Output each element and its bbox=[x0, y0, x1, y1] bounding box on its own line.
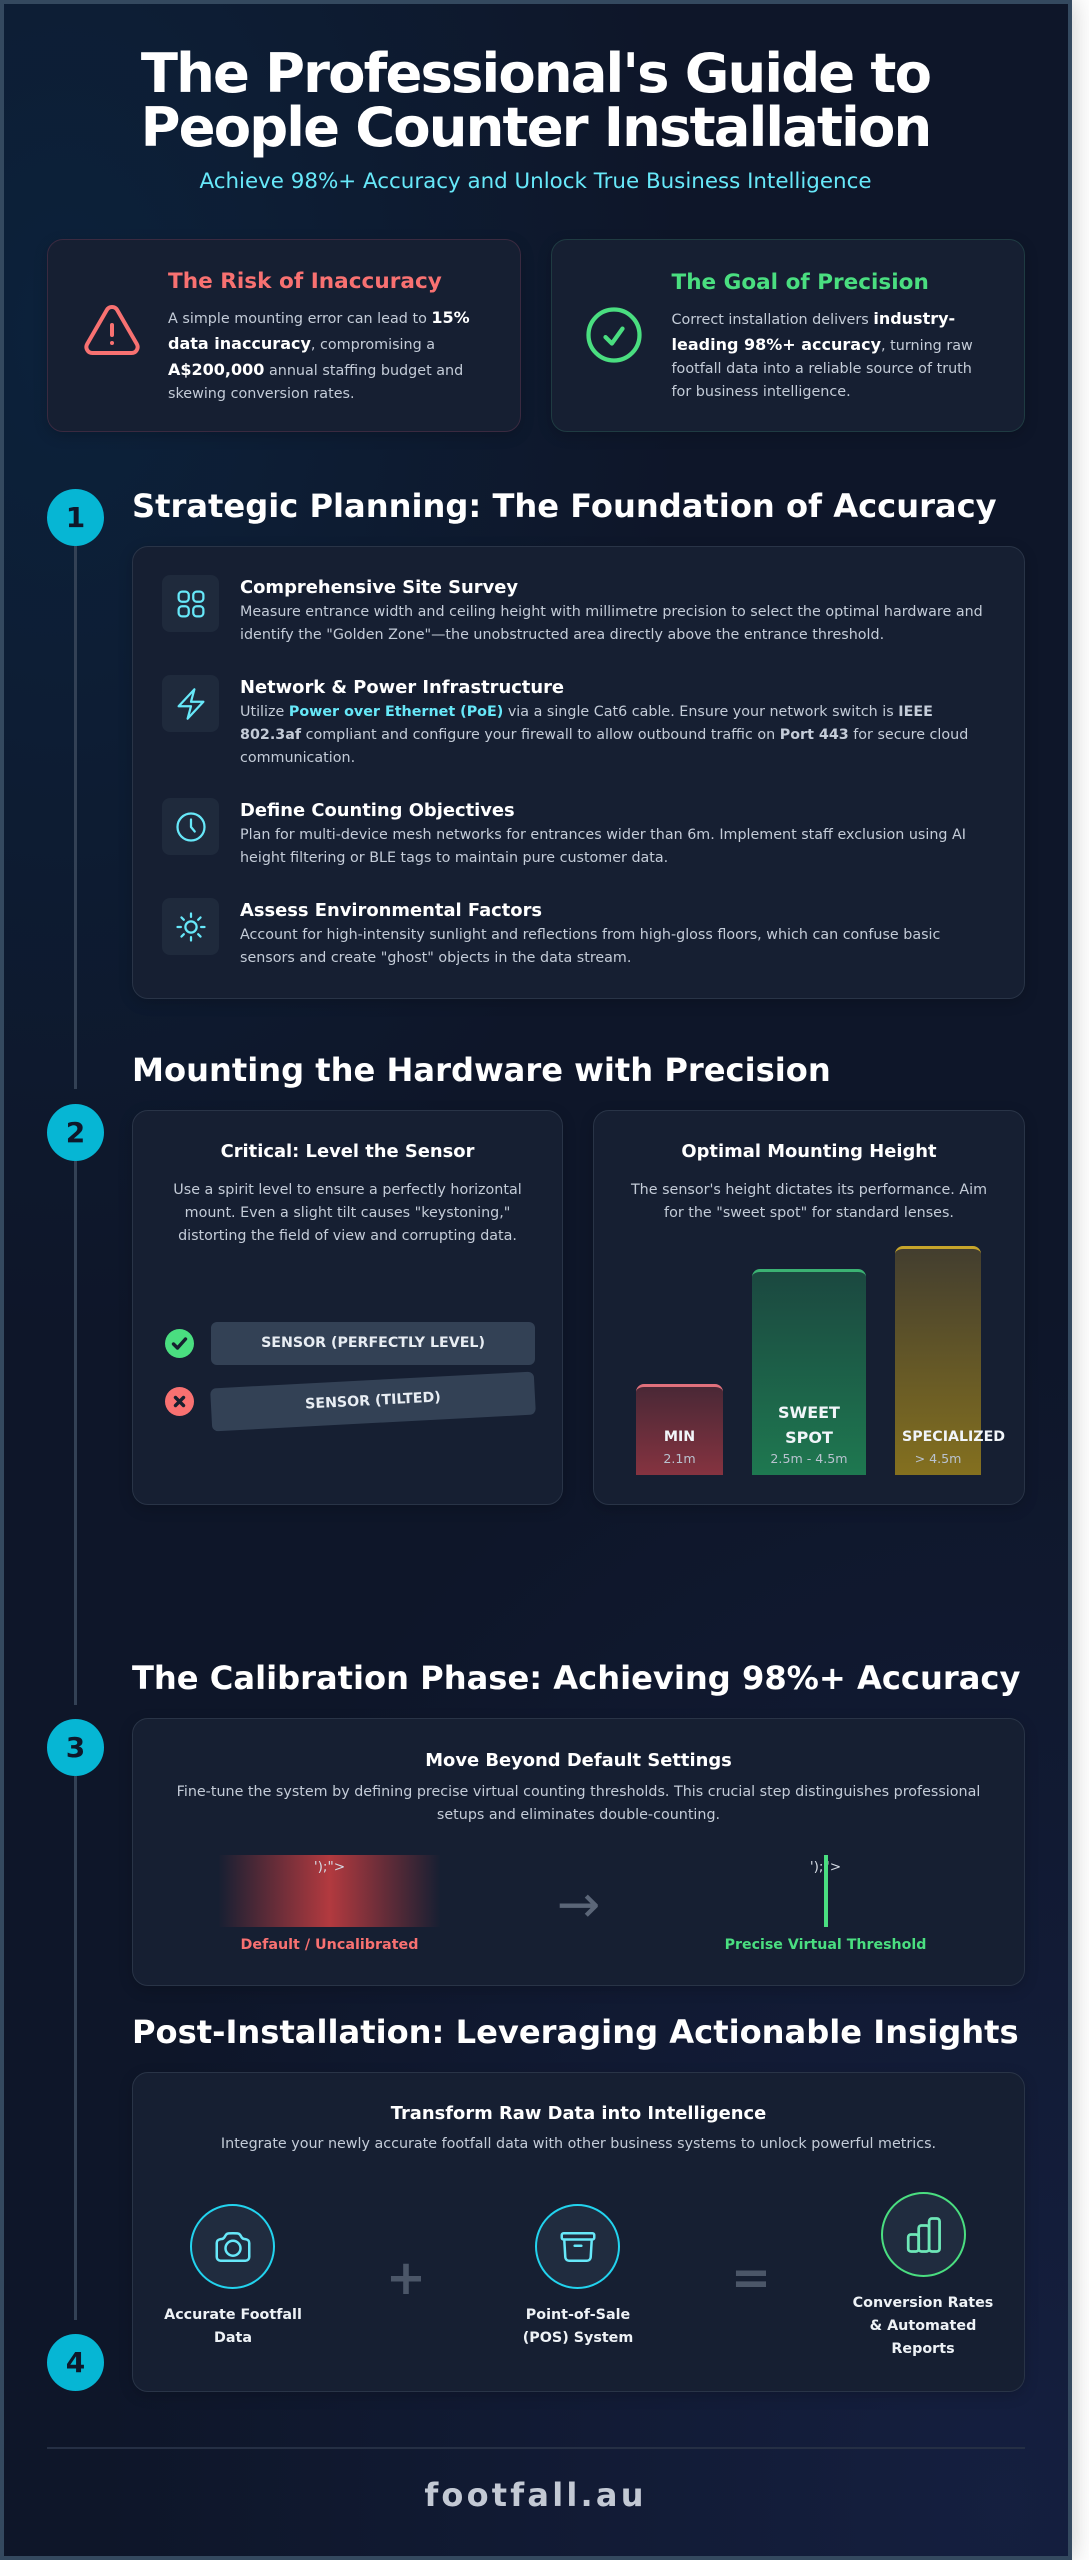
item text: counting objectives bbox=[240, 826, 966, 866]
item text: site survey: Measure entrance width and ceiling height with millimetre precision to select the optimal hardware and bbox=[240, 604, 983, 620]
panel: mounting height bbox=[593, 1110, 1025, 1505]
text: mounting height: for the "sweet spot" for standard lenses. bbox=[664, 1205, 954, 1221]
item text: site survey: identify the "Golden Zone"—the unobstructed area directly above the entrance threshold. bbox=[240, 626, 884, 642]
text: level the sensor bbox=[173, 1182, 522, 1244]
chart bar: minimum height bbox=[636, 1384, 723, 1475]
step number 1 bbox=[47, 489, 104, 546]
text: goal description: footfall data into a reliable source of truth bbox=[672, 360, 972, 376]
sensor bar: level bbox=[211, 1322, 535, 1365]
chart bar: specialized bbox=[895, 1246, 981, 1475]
item title: environmental factors: Assess Environmental Factors bbox=[240, 900, 542, 921]
visual: uncalibrated zone bbox=[218, 1855, 441, 1927]
text: goal description bbox=[672, 308, 973, 400]
heading: calibration: The Calibration Phase: Achieving 98%+ Accuracy bbox=[132, 1659, 1020, 1697]
heading: goal: The Goal of Precision bbox=[672, 270, 929, 295]
visual: uncalibrated zone: ');"> bbox=[314, 1859, 345, 1875]
item text: environmental factors: sensors and create "ghost" objects in the data stream. bbox=[240, 950, 631, 966]
step number 2 bbox=[47, 1104, 104, 1161]
icon: tilted cross bbox=[165, 1387, 194, 1416]
text: default settings: Fine-tune the system by defining precise virtual counting thresholds. This crucial step distinguishes professional bbox=[177, 1784, 980, 1800]
value: specialized: > 4.5m bbox=[915, 1451, 961, 1466]
item text: network and power: Utilize Power over Ethernet (PoE) via a single Cat6 cable. Ensure your network switch is IEEE bbox=[240, 704, 933, 720]
label: specialized: SPECIALIZED bbox=[902, 1429, 1005, 1445]
title: The Professional's Guide to bbox=[141, 42, 930, 105]
step number 3: 3 bbox=[66, 1731, 85, 1764]
item text: network and power bbox=[240, 704, 968, 766]
item text: network and power: communication. bbox=[240, 750, 355, 766]
item text: counting objectives: height filtering or BLE tags to maintain pure customer data. bbox=[240, 850, 668, 866]
step number 4: 4 bbox=[66, 2346, 85, 2379]
chart bar: sweet spot bbox=[752, 1269, 866, 1475]
text: goal description: leading 98%+ accuracy, turning raw bbox=[672, 334, 973, 354]
label: min: MIN bbox=[664, 1429, 695, 1445]
label: conversion rates: & Automated bbox=[870, 2318, 976, 2334]
footer brand: footfall.au bbox=[424, 2476, 647, 2514]
step number 1: 1 bbox=[66, 501, 85, 534]
label: accurate footfall: Data bbox=[214, 2330, 252, 2346]
item text: environmental factors bbox=[240, 926, 940, 966]
label: accurate footfall: Accurate Footfall bbox=[164, 2307, 302, 2323]
visual: precise threshold bbox=[810, 1855, 841, 1927]
stray text: ');"> bbox=[810, 1859, 841, 1875]
heading: mounting height: Optimal Mounting Height bbox=[681, 1141, 937, 1162]
label: conversion rates: Reports bbox=[891, 2341, 955, 2357]
panel: goal of precision bbox=[550, 239, 1025, 432]
timeline connector 3 bbox=[74, 1776, 77, 2320]
threshold line bbox=[824, 1855, 828, 1927]
icon: level check bbox=[165, 1329, 194, 1358]
plus sign: + bbox=[386, 2250, 426, 2306]
icon: site survey bbox=[162, 575, 219, 632]
footer divider bbox=[47, 2447, 1025, 2449]
title bbox=[141, 42, 930, 159]
label: point of sale: (POS) System bbox=[523, 2330, 633, 2346]
label: conversion rates: Conversion Rates bbox=[853, 2295, 993, 2311]
text: goal description: for business intelligence. bbox=[672, 384, 851, 400]
timeline connector 1 bbox=[74, 545, 77, 1089]
subtitle: Achieve 98%+ Accuracy and Unlock True Business Intelligence bbox=[199, 169, 872, 194]
title: People Counter Installation bbox=[141, 96, 930, 159]
text: goal description: Correct installation delivers industry- bbox=[672, 308, 955, 328]
label: sweet spot bbox=[778, 1402, 840, 1446]
text: default settings bbox=[177, 1784, 980, 1823]
text: mounting height bbox=[630, 1182, 987, 1221]
text: risk description: A$200,000 annual staffing budget and bbox=[168, 360, 463, 379]
label: conversion rates bbox=[853, 2295, 993, 2357]
icon: bar chart bbox=[881, 2192, 966, 2277]
heading: risk: The Risk of Inaccuracy bbox=[168, 269, 442, 294]
heading: strategic planning: Strategic Planning: The Foundation of Accuracy bbox=[132, 487, 997, 525]
step number 4 bbox=[47, 2334, 104, 2391]
text: risk description: A simple mounting error can lead to 15% bbox=[168, 308, 470, 327]
step number 3 bbox=[47, 1719, 104, 1776]
heading: mounting: Mounting the Hardware with Precision bbox=[132, 1051, 831, 1089]
sensor bar: tilted: SENSOR (TILTED) bbox=[305, 1389, 441, 1413]
icon: check circle bbox=[586, 307, 642, 363]
timeline connector 2 bbox=[74, 1160, 77, 1705]
label: uncalibrated: Default / Uncalibrated bbox=[241, 1936, 418, 1952]
item title: counting objectives: Define Counting Objectives bbox=[240, 800, 515, 821]
equals sign: = bbox=[731, 2250, 771, 2306]
heading: post-installation: Post-Installation: Leveraging Actionable Insights bbox=[132, 2013, 1019, 2051]
icon: warning triangle bbox=[84, 305, 140, 355]
item text: environmental factors: Account for high-intensity sunlight and reflections from high-gloss floors, which can confuse basic bbox=[240, 926, 940, 942]
sensor bar: tilted bbox=[210, 1372, 536, 1431]
step number 2: 2 bbox=[66, 1116, 85, 1149]
text: risk description: data inaccuracy, compromising a bbox=[168, 334, 435, 353]
item text: counting objectives: Plan for multi-device mesh networks for entrances wider than 6m. Implement staff exclusion using AI bbox=[240, 826, 966, 842]
panel: strategic planning bbox=[132, 546, 1025, 999]
panel: calibration bbox=[132, 1718, 1025, 1986]
item text: network and power: 802.3af compliant and configure your firewall to allow outbound traffic on Port 443 for secure cloud bbox=[240, 726, 968, 742]
label: sweet spot: SWEET bbox=[778, 1402, 840, 1422]
text: risk description: skewing conversion rates. bbox=[168, 386, 355, 402]
item text: site survey bbox=[240, 604, 983, 642]
heading: level the sensor: Critical: Level the Sensor bbox=[221, 1141, 474, 1162]
item title: network and power: Network & Power Infrastructure bbox=[240, 677, 564, 698]
text: level the sensor: Use a spirit level to ensure a perfectly horizontal bbox=[173, 1182, 522, 1198]
icon: counting objectives bbox=[162, 798, 219, 855]
arrow: → bbox=[557, 1875, 600, 1935]
value: min: 2.1m bbox=[663, 1451, 696, 1466]
heading: insights: Transform Raw Data into Intelligence bbox=[391, 2103, 766, 2124]
label: sweet spot: SPOT bbox=[785, 1428, 833, 1446]
sensor bar: level: SENSOR (PERFECTLY LEVEL) bbox=[261, 1335, 485, 1351]
icon: network and power bbox=[162, 675, 219, 732]
icon: environmental factors bbox=[162, 898, 219, 955]
icon: camera bbox=[190, 2204, 275, 2289]
text: mounting height: The sensor's height dictates its performance. Aim bbox=[631, 1182, 987, 1198]
label: point of sale bbox=[523, 2307, 633, 2346]
label: accurate footfall bbox=[164, 2307, 302, 2346]
icon: archive box bbox=[535, 2204, 620, 2289]
panel: insights bbox=[132, 2072, 1025, 2392]
label: precise threshold: Precise Virtual Threshold bbox=[725, 1936, 926, 1952]
text: default settings: setups and eliminates double-counting. bbox=[437, 1807, 720, 1823]
panel: level the sensor bbox=[132, 1110, 563, 1505]
text: risk description bbox=[168, 308, 470, 402]
heading: default settings: Move Beyond Default Settings bbox=[425, 1750, 732, 1771]
item title: site survey: Comprehensive Site Survey bbox=[240, 577, 518, 598]
panel: risk of inaccuracy bbox=[47, 239, 521, 432]
text: level the sensor: mount. Even a slight tilt causes "keystoning," bbox=[185, 1205, 510, 1221]
text: insights: Integrate your newly accurate footfall data with other business systems to unlock powerful metrics. bbox=[221, 2136, 936, 2152]
label: point of sale: Point-of-Sale bbox=[526, 2307, 630, 2323]
value: sweet spot: 2.5m - 4.5m bbox=[770, 1451, 848, 1466]
text: level the sensor: distorting the field of view and corrupting data. bbox=[178, 1228, 517, 1244]
